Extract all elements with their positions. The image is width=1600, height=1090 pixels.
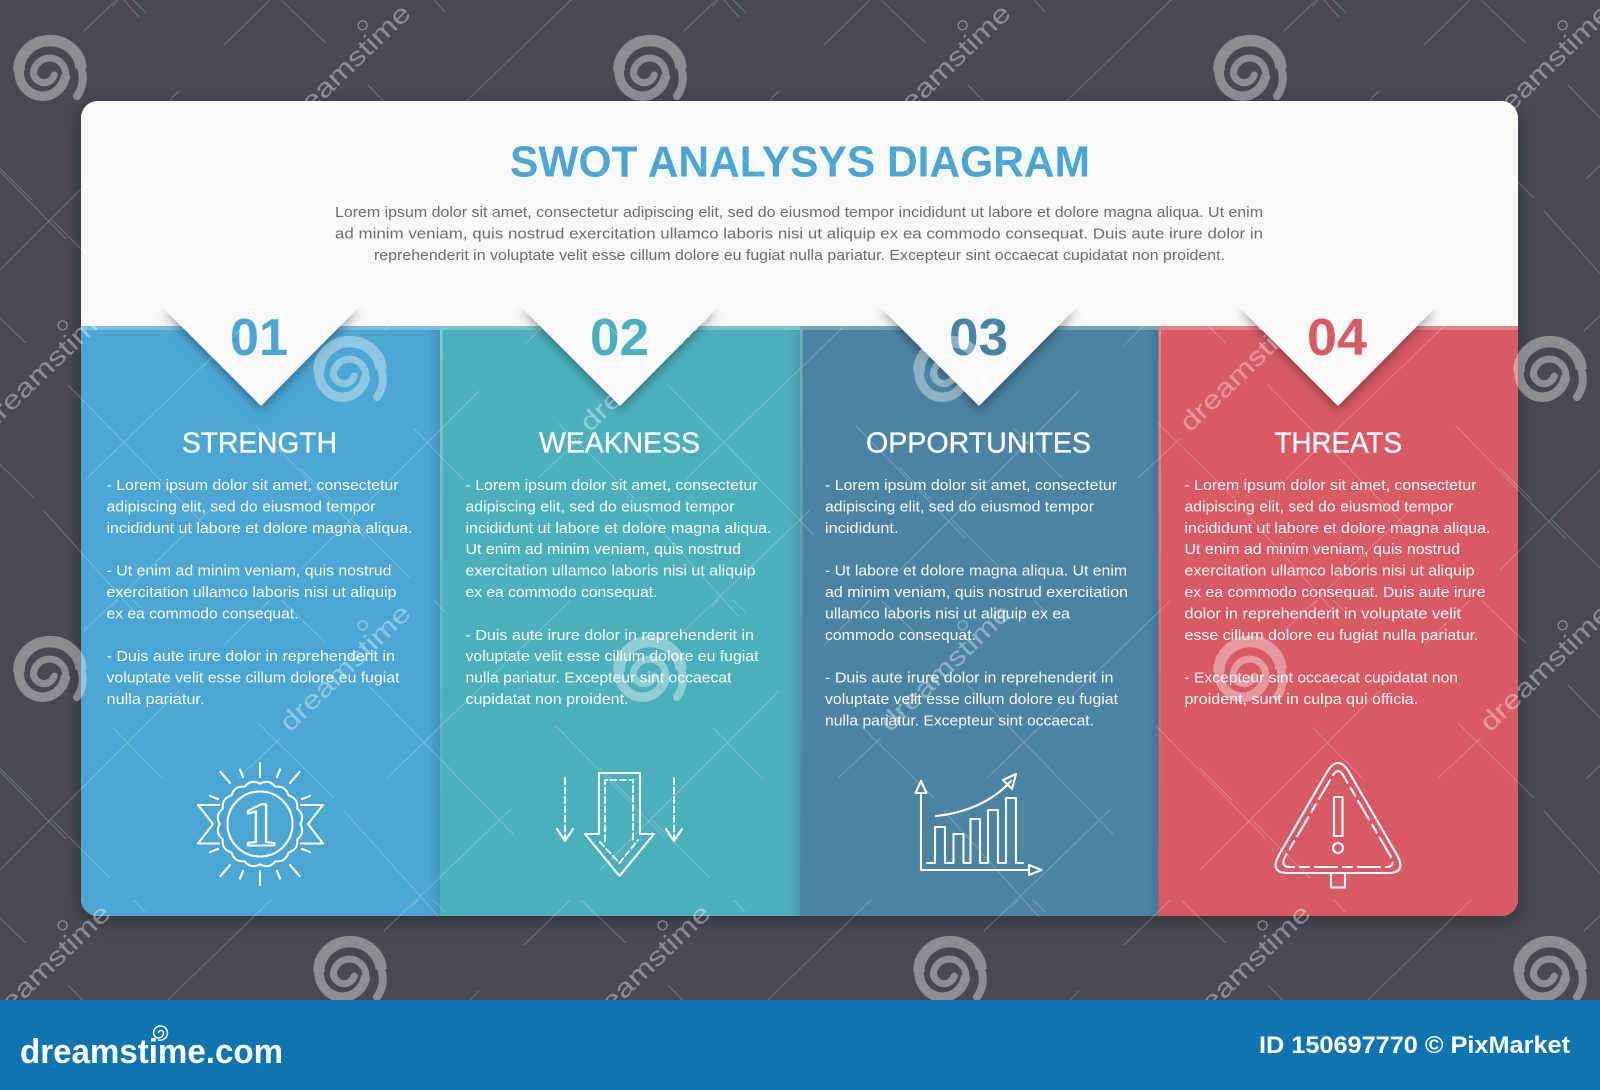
column: threats (1184, 309, 1490, 888)
strength text: - Lorem ipsum dolor sit amet, consectetur (106, 477, 398, 494)
number 01: 01 (230, 309, 288, 367)
weakness text: adipiscing elit, sed do eiusmod tempor (466, 498, 735, 515)
strength text: nulla pariatur. (106, 691, 204, 708)
chevron 01 (163, 308, 358, 406)
footer image id: ID 150697770 © PixMarket (1259, 1032, 1570, 1059)
heading: threats: THREATS (1274, 428, 1402, 460)
threats text: Ut enim ad minim veniam, quis nostrud (1184, 541, 1460, 558)
opportunities text: nulla pariatur. Excepteur sint occaecat. (825, 712, 1094, 729)
threats text: dolor in reprehenderit in voluptate velit (1184, 605, 1462, 622)
opportunities text: - Duis aute irure dolor in reprehenderit in (825, 670, 1114, 687)
threats text: - Excepteur sint occaecat cupidatat non (1184, 670, 1458, 687)
column: strength (106, 309, 413, 885)
number 02: 02 (590, 309, 649, 367)
opportunities text: incididunt. (825, 520, 898, 537)
weakness text: ex ea commodo consequat. (466, 584, 658, 601)
watermark text: dreamstime (1473, 598, 1600, 737)
header cover above chevrons (81, 285, 1518, 308)
panel: opportunities background (800, 326, 1158, 916)
watermark text: dreamstime (873, 0, 1016, 137)
panel: threats background (1158, 326, 1518, 916)
weakness text: cupidatat non proident. (466, 691, 628, 708)
chevron 03 (881, 308, 1076, 406)
weakness text: incididunt ut labore et dolore magna aliqua. (466, 520, 772, 537)
chevron 02 (522, 308, 717, 406)
column: weakness (466, 309, 772, 876)
watermark text: dreamstime (1173, 898, 1316, 1037)
panel: strength background (81, 326, 440, 916)
watermark text: dreamstime (1473, 0, 1600, 137)
number 04: 04 (1307, 309, 1367, 367)
footer band (0, 1000, 1600, 1090)
icon: medal: 1 (242, 792, 278, 860)
opportunities text: commodo consequat. (825, 627, 976, 644)
weakness text: Ut enim ad minim veniam, quis nostrud (466, 541, 741, 558)
header panel (81, 101, 1518, 118)
weakness text: - Duis aute irure dolor in reprehenderit in (466, 627, 754, 644)
weakness text: exercitation ullamco laboris nisi ut aliquip (466, 563, 756, 580)
watermark text: dreamstime (573, 898, 716, 1037)
strength text (106, 477, 413, 708)
column: opportunities (825, 309, 1128, 875)
intro text: reprehenderit in voluptate velit esse cillum dolore eu fugiat nulla pariatur. Excepteur sint occaecat cupidatat non proident. (374, 247, 1225, 264)
number 03: 03 (949, 309, 1008, 367)
watermark text: dreamstime (1173, 298, 1316, 437)
strength text: exercitation ullamco laboris nisi ut aliquip (106, 584, 396, 601)
strength text: - Duis aute irure dolor in reprehenderit in (106, 648, 395, 665)
opportunities text: adipiscing elit, sed do eiusmod tempor (825, 498, 1094, 515)
threats text: incididunt ut labore et dolore magna aliqua. (1184, 520, 1490, 537)
opportunities text: ad minim veniam, quis nostrud exercitation (825, 584, 1128, 601)
watermark text: dreamstime (273, 598, 416, 737)
strength text: incididunt ut labore et dolore magna aliqua. (106, 520, 413, 537)
threats text: ex ea commodo consequat. Duis aute irure (1184, 584, 1486, 601)
card shadow base (81, 101, 1518, 916)
opportunities text: voluptate velit esse cillum dolore eu fugiat (825, 691, 1119, 708)
opportunities text (825, 477, 1128, 729)
threats text: proident, sunt in culpa qui officia. (1184, 691, 1418, 708)
threats text: exercitation ullamco laboris nisi ut aliquip (1184, 563, 1474, 580)
weakness text: - Lorem ipsum dolor sit amet, consectetur (466, 477, 758, 494)
heading: strength: STRENGTH (182, 428, 337, 460)
watermark text: dreamstime (873, 598, 1016, 737)
weakness text (466, 477, 772, 708)
strength text: voluptate velit esse cillum dolore eu fugiat (106, 670, 400, 687)
chevron 04 (1240, 308, 1435, 406)
icon: down arrows (557, 773, 682, 876)
intro text: ad minim veniam, quis nostrud exercitation ullamco laboris nisi ut aliquip ex ea commodo consequat. Duis aute irure dolor in (335, 226, 1263, 242)
heading: opportunities: OPPORTUNITES (866, 428, 1091, 460)
watermark text: dreamstime (573, 298, 716, 437)
strength text: adipiscing elit, sed do eiusmod tempor (106, 498, 376, 515)
panel: weakness background (440, 326, 800, 916)
threats text: - Lorem ipsum dolor sit amet, consectetur (1184, 477, 1476, 494)
opportunities text: - Ut labore et dolore magna aliqua. Ut enim (825, 563, 1127, 580)
main card (81, 101, 1518, 916)
title: SWOT ANALYSYS DIAGRAM (510, 138, 1090, 186)
icon: growth chart (916, 774, 1042, 875)
intro text: Lorem ipsum dolor sit amet, consectetur adipiscing elit, sed do eiusmod tempor incididunt ut labore et dolore magna aliqua. Ut enim (335, 204, 1263, 221)
heading: weakness: WEAKNESS (539, 428, 700, 460)
strength text: ex ea commodo consequat. (106, 605, 298, 622)
footer logo: dreamstime.com (20, 1033, 283, 1071)
threats text: esse cillum dolore eu fugiat nulla pariatur. (1184, 627, 1478, 644)
strength text: - Ut enim ad minim veniam, quis nostrud (106, 563, 392, 580)
intro text (335, 204, 1263, 264)
weakness text: nulla pariatur. Excepteur sint occaecat (466, 670, 732, 687)
weakness text: voluptate velit esse cillum dolore eu fugiat (466, 648, 759, 665)
opportunities text: ullamco laboris nisi ut aliquip ex ea (825, 605, 1071, 622)
opportunities text: - Lorem ipsum dolor sit amet, consectetur (825, 477, 1117, 494)
icon: medal (198, 763, 323, 885)
threats text (1184, 477, 1490, 708)
watermark text: dreamstime (273, 0, 416, 137)
icon: warning sign (1276, 763, 1400, 888)
threats text: adipiscing elit, sed do eiusmod tempor (1184, 498, 1454, 515)
